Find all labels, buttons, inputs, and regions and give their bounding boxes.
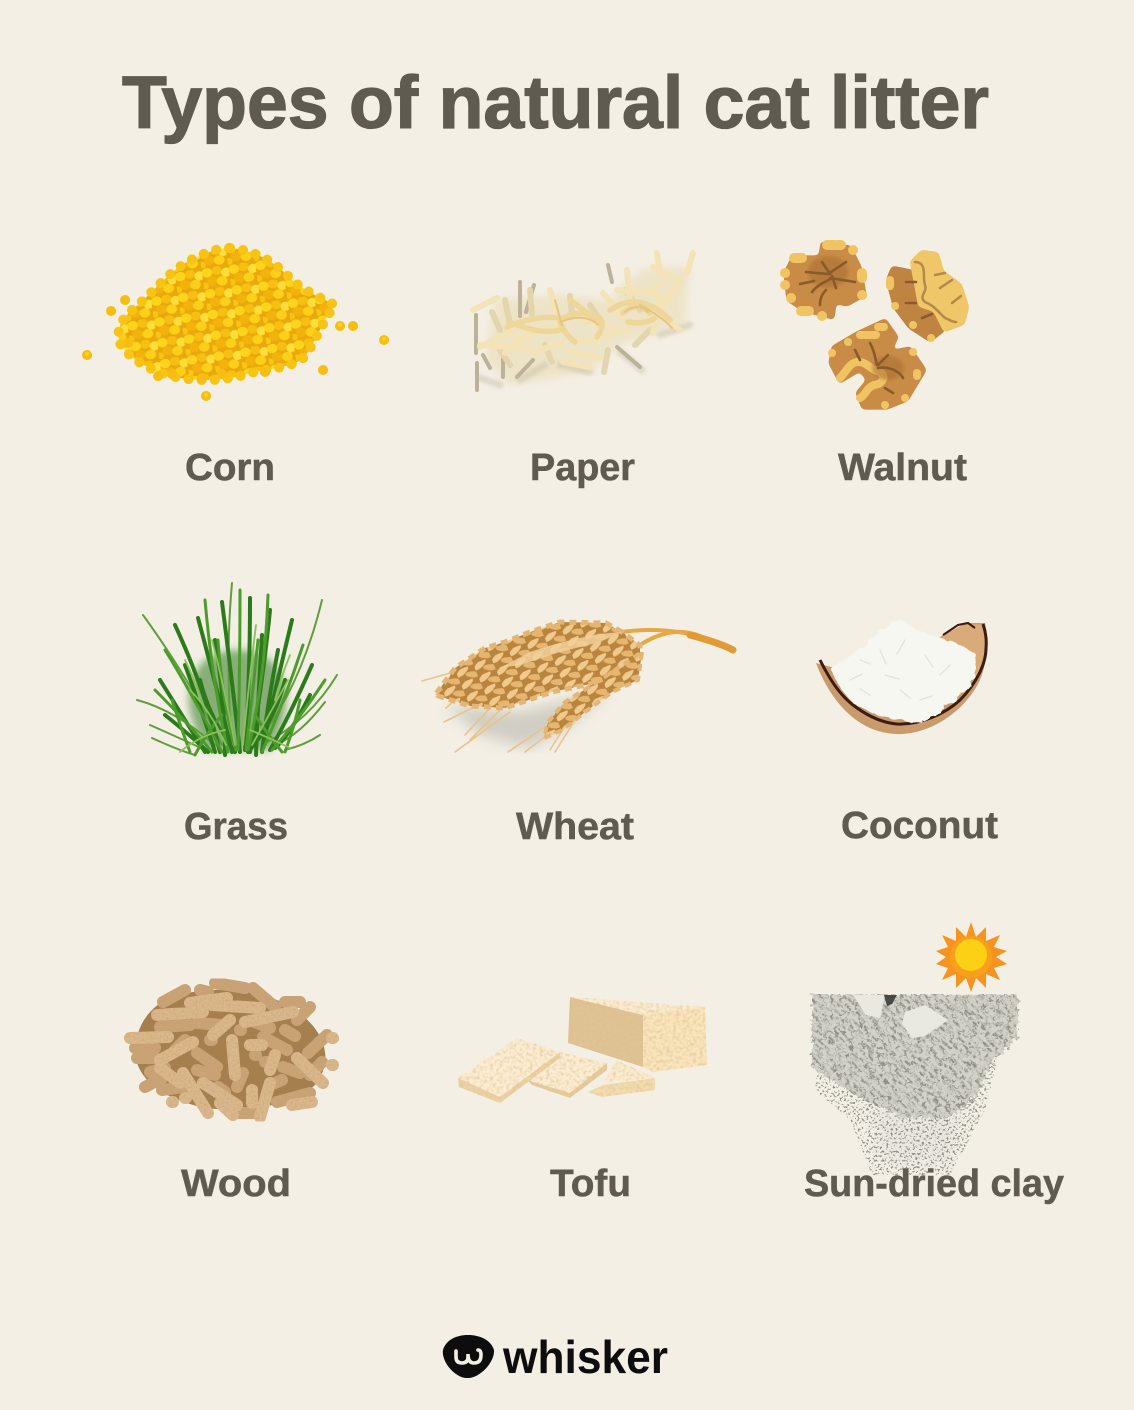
- icon: clay powder: [812, 980, 1018, 1175]
- icon: shredded paper: [473, 253, 693, 390]
- panel: wood: [130, 983, 333, 1205]
- icon: sun: [936, 922, 1007, 992]
- icon: tofu block and slices: [458, 997, 707, 1103]
- panel: grass: [137, 583, 337, 848]
- walnut: bottom: [830, 320, 925, 408]
- label: coconut: Coconut: [841, 805, 998, 847]
- stems: [622, 630, 705, 645]
- label: grass: Grass: [184, 806, 288, 848]
- tofu slice 3: [588, 1060, 655, 1097]
- clay pale scatter haze: [870, 1110, 960, 1165]
- wordmark: whisker: [502, 1331, 668, 1383]
- label: corn: Corn: [185, 447, 275, 489]
- logo: whisker: [443, 1331, 668, 1383]
- coconut flakes: [830, 620, 977, 722]
- panel: paper: [473, 253, 693, 489]
- panel: sun-dried clay: [804, 922, 1064, 1205]
- panel: tofu: [458, 997, 707, 1205]
- coconut shell: [816, 623, 987, 734]
- label: wheat: Wheat: [516, 806, 634, 848]
- label: paper: Paper: [530, 447, 635, 489]
- tofu block: [568, 997, 707, 1072]
- walnut: top left: [785, 243, 865, 318]
- icon: wheat ears: [422, 622, 733, 752]
- icon: walnuts: [785, 243, 967, 408]
- icon: whisker shield: [443, 1335, 494, 1378]
- tofu slice 1: [458, 1038, 560, 1103]
- icon: grass tuft: [137, 583, 337, 755]
- label: sun-dried clay: Sun-dried clay: [804, 1163, 1064, 1205]
- label: walnut: Walnut: [838, 447, 967, 489]
- icon: corn kernel pile: [87, 248, 384, 396]
- title: Types of natural cat litter: [122, 61, 989, 144]
- tofu slice 2: [527, 1052, 607, 1098]
- clay speckled scatter: [815, 1050, 1000, 1175]
- icon: coconut shell with flakes: [816, 620, 987, 734]
- panel: corn: [87, 248, 384, 489]
- icon: wood pellets: [130, 983, 333, 1117]
- panel: coconut: [816, 620, 998, 847]
- walnut: right: [888, 252, 967, 340]
- panel: wheat: [422, 622, 733, 848]
- label: wood: Wood: [181, 1163, 291, 1205]
- label: tofu: Tofu: [550, 1163, 631, 1205]
- panel: walnut: [785, 243, 967, 489]
